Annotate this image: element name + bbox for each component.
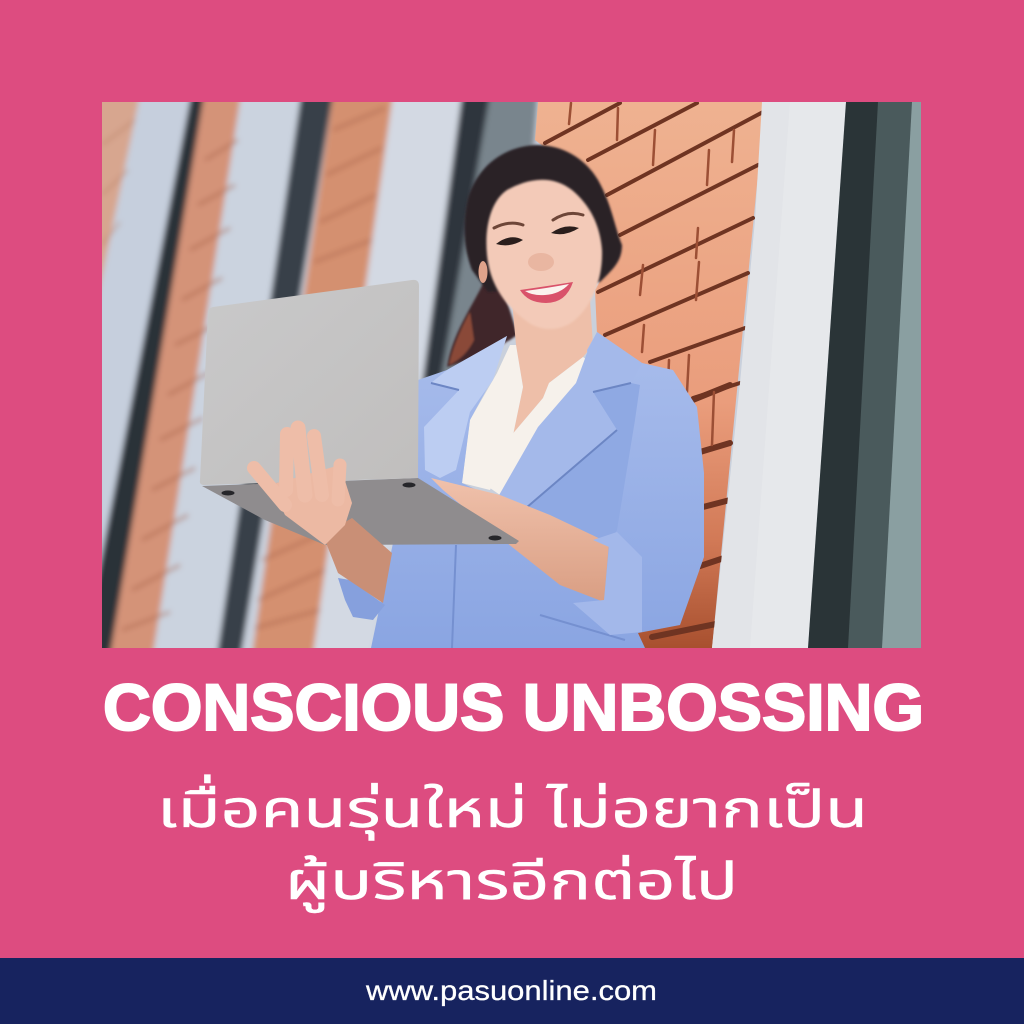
blurred building background	[102, 102, 846, 648]
subtitle line 2: ผู้บริหารอีกต่อไป	[285, 853, 738, 913]
nose	[528, 253, 554, 271]
neck and chest skin	[513, 300, 593, 432]
footer url: www.pasuonline.com	[365, 975, 657, 1006]
dark window frame	[808, 102, 921, 648]
blouse left panel	[462, 345, 523, 490]
rolled cuff	[573, 532, 642, 635]
laptop lid	[200, 280, 419, 485]
laptop base	[202, 478, 519, 545]
photo: woman holding laptop against a brick wall	[95, 95, 930, 655]
lapel shadow	[431, 383, 631, 508]
right forearm	[431, 478, 609, 602]
blazer under-lapel panel	[530, 383, 640, 514]
blouse right panel	[490, 357, 590, 495]
face	[486, 180, 602, 329]
mouth	[520, 282, 573, 303]
left forearm and hand	[254, 428, 392, 603]
footer bar	[0, 958, 1024, 1024]
fingers	[254, 428, 340, 505]
ponytail	[447, 280, 517, 367]
laptop feet	[222, 482, 502, 540]
laptop	[200, 280, 519, 545]
brick wall	[535, 102, 764, 648]
left sleeve	[338, 578, 385, 620]
title: CONSCIOUS UNBOSSING	[103, 670, 924, 744]
facial features	[494, 213, 583, 303]
subtitle line 1: เมื่อคนรุ่นใหม่ ไม่อยากเป็น	[157, 774, 868, 841]
palm	[270, 465, 352, 545]
white pillar	[712, 102, 846, 648]
right lapel	[498, 332, 642, 508]
blazer body	[360, 332, 704, 648]
hair	[465, 145, 622, 292]
pocket seam	[452, 545, 625, 648]
teeth	[525, 284, 569, 295]
eyebrows	[494, 213, 583, 228]
eyes	[496, 226, 579, 245]
left forearm	[323, 518, 392, 603]
blazer	[338, 332, 704, 648]
left lapel	[424, 336, 507, 478]
mortar lines	[545, 103, 763, 637]
ear	[478, 261, 488, 283]
